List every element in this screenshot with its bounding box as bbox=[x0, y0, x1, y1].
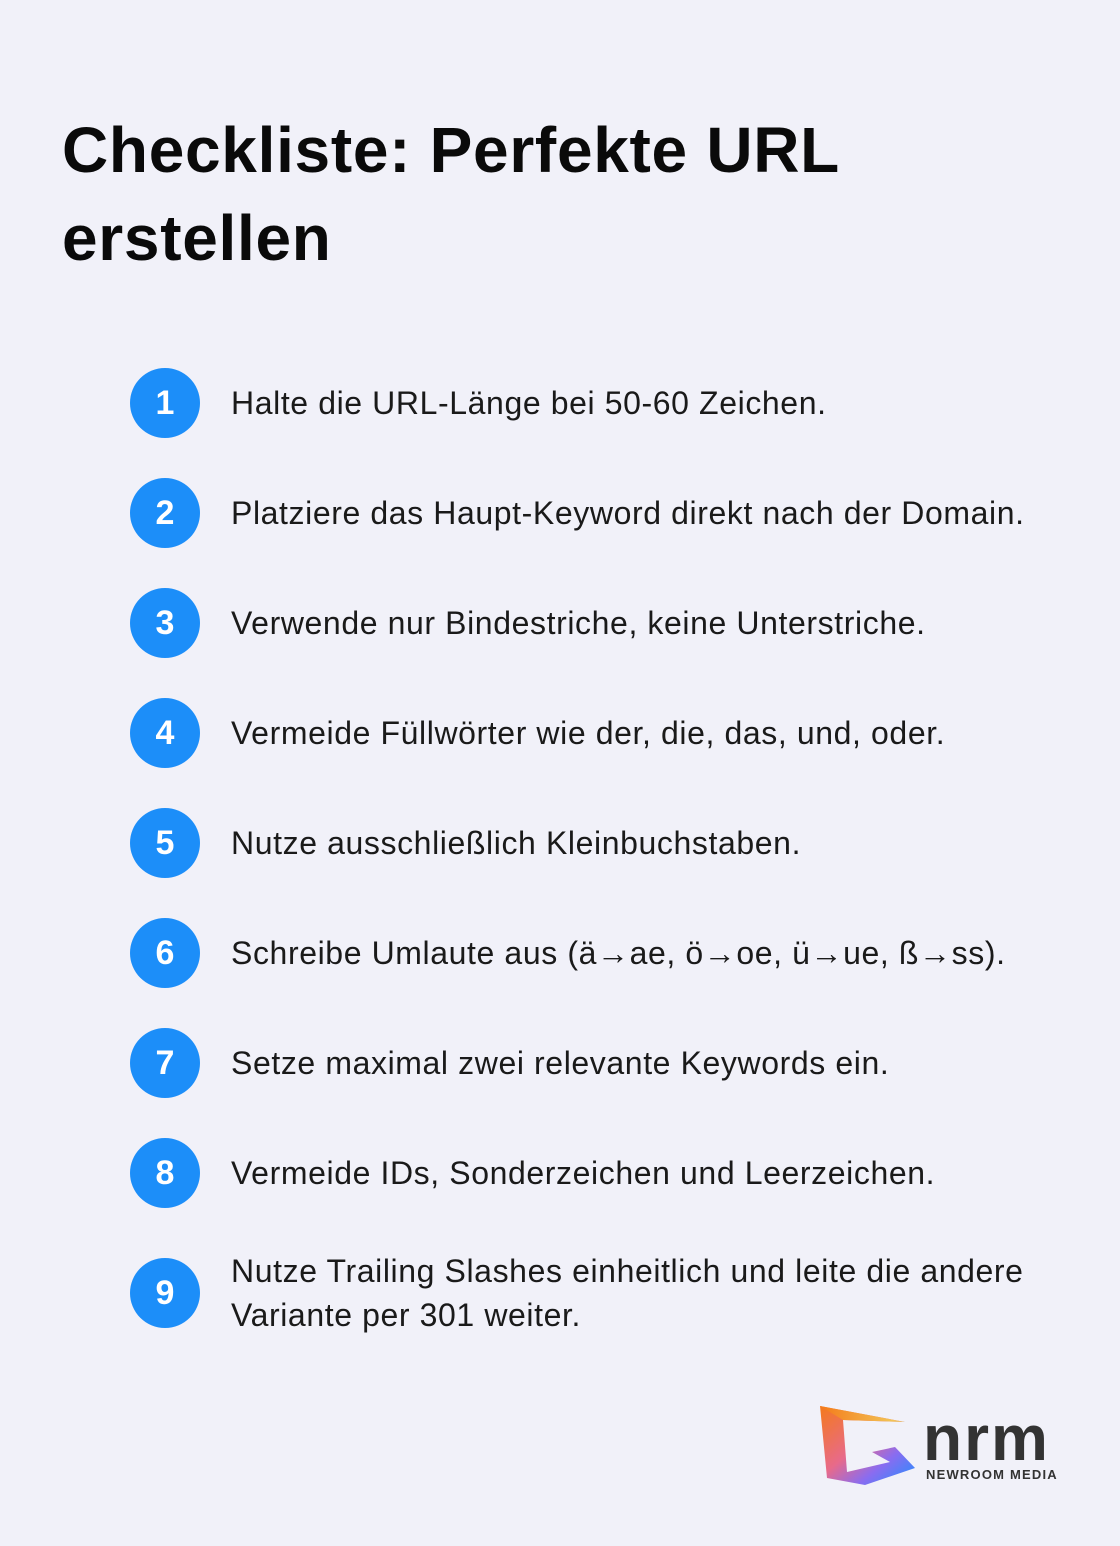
item 5: Nutze ausschließlich Kleinbuchstaben. bbox=[231, 825, 801, 861]
item 7: Setze maximal zwei relevante Keywords ein. bbox=[231, 1045, 889, 1081]
item 7 bbox=[130, 1028, 889, 1098]
item 8 bbox=[130, 1138, 935, 1208]
item 6: 6 bbox=[156, 934, 174, 972]
item 5: 5 bbox=[156, 824, 174, 862]
title: erstellen bbox=[62, 202, 332, 274]
item 9: 9 bbox=[156, 1274, 174, 1312]
item 2: 2 bbox=[156, 494, 174, 532]
logo: NEWROOM MEDIA bbox=[926, 1467, 1058, 1482]
item 7: 7 bbox=[156, 1044, 174, 1082]
item 4 bbox=[130, 698, 945, 768]
item 3: Verwende nur Bindestriche, keine Unterstriche. bbox=[231, 605, 926, 641]
logo: nrm bbox=[923, 1402, 1050, 1474]
title: Checkliste: Perfekte URL bbox=[62, 114, 840, 186]
item 8: Vermeide IDs, Sonderzeichen und Leerzeichen. bbox=[231, 1155, 935, 1191]
item 3 bbox=[130, 588, 926, 658]
item 1 bbox=[130, 368, 827, 438]
item 6: Schreibe Umlaute aus (ä→ae, ö→oe, ü→ue, ß→ss). bbox=[231, 935, 1006, 971]
item 2: Platziere das Haupt-Keyword direkt nach der Domain. bbox=[231, 495, 1025, 531]
item 8: 8 bbox=[156, 1154, 174, 1192]
item 1: 1 bbox=[156, 384, 174, 422]
title bbox=[62, 114, 840, 274]
item 9 bbox=[130, 1253, 1024, 1333]
item 5 bbox=[130, 808, 801, 878]
item 4: Vermeide Füllwörter wie der, die, das, und, oder. bbox=[231, 715, 945, 751]
item 9: Variante per 301 weiter. bbox=[231, 1297, 581, 1333]
item 9: Nutze Trailing Slashes einheitlich und leite die andere bbox=[231, 1253, 1024, 1289]
item 2 bbox=[130, 478, 1025, 548]
item 3: 3 bbox=[156, 604, 174, 642]
logo bbox=[820, 1402, 1058, 1485]
item 6 bbox=[130, 918, 1006, 988]
item 4: 4 bbox=[156, 714, 174, 752]
item 1: Halte die URL-Länge bei 50-60 Zeichen. bbox=[231, 385, 827, 421]
